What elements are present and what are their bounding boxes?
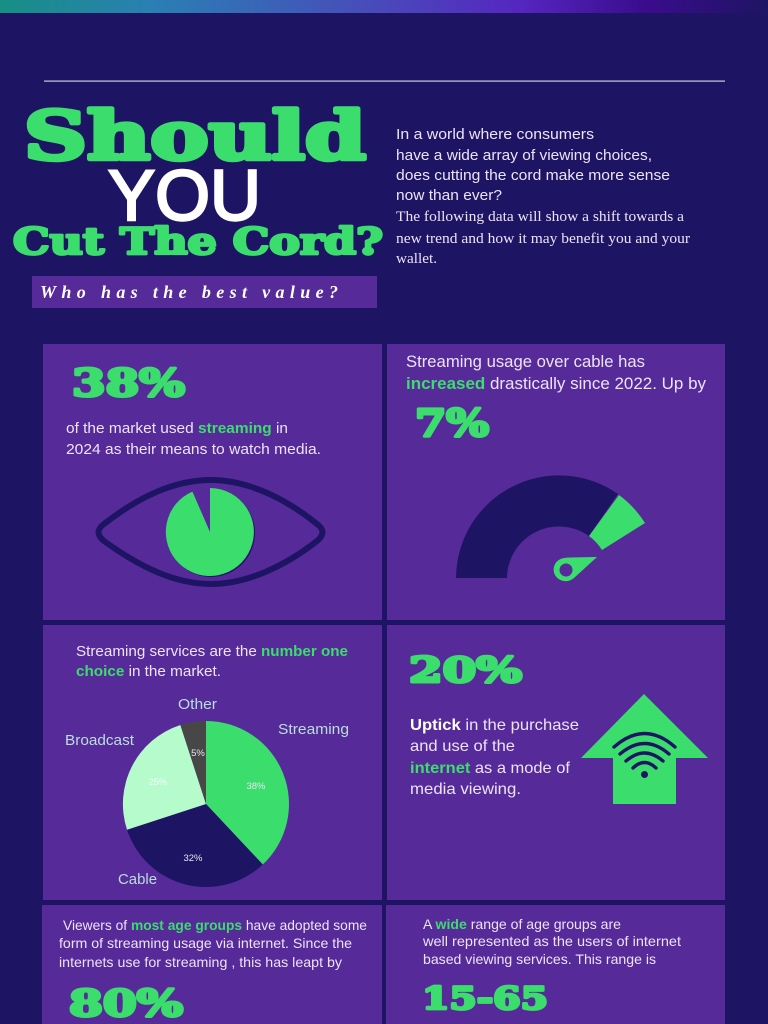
- intro text: new trend and how it may benefit you and your: [396, 231, 690, 247]
- subtitle banner: Who has the best value?: [40, 282, 338, 302]
- title line: Should: Should: [24, 97, 366, 175]
- chart: pie: 32%: [183, 853, 203, 864]
- text: wide range: A wide range of age groups are: [423, 916, 621, 932]
- title line: Cut The Cord?: Cut The Cord?: [13, 221, 383, 263]
- top gradient band: [0, 0, 768, 13]
- intro text: The following data will show a shift towards a: [396, 209, 684, 225]
- stat: 80%: 80%: [69, 983, 183, 1024]
- text: streaming over cable: increased drastically since 2022. Up by: [406, 375, 707, 393]
- icon: arrow with wifi: [581, 694, 708, 804]
- text: uptick: [410, 717, 579, 798]
- text: uptick: and use of the: [410, 738, 515, 755]
- text: number one choice: [76, 643, 348, 680]
- text: age groups: [59, 917, 367, 970]
- text: uptick: Uptick in the purchase: [410, 717, 579, 734]
- text: number one choice: Streaming services are the number one: [76, 643, 348, 660]
- panel: 20% internet uptick: [387, 625, 725, 900]
- chart: pie: 5%: [191, 748, 205, 759]
- text: wide range: [422, 916, 681, 967]
- stat: 38%: 38%: [72, 361, 185, 405]
- icon: eye with pie pupil: [98, 480, 322, 584]
- chart: pie: 25%: [148, 777, 168, 788]
- chart: pie: 38%: [246, 781, 266, 792]
- text: age groups: internets use for streaming , this has leapt by: [59, 954, 342, 970]
- stat: 7%: 7%: [415, 401, 489, 445]
- label: Cable: Cable: [118, 871, 157, 888]
- stat: 20%: 20%: [409, 650, 522, 691]
- text: market share: [66, 420, 321, 458]
- text: market share: of the market used streaming in: [66, 420, 288, 437]
- text: uptick: media viewing.: [410, 781, 521, 798]
- subtitle banner: [32, 276, 377, 308]
- intro text: now than ever?: [396, 187, 502, 204]
- text: wide range: based viewing services. This range is: [423, 951, 656, 967]
- text: age groups: Viewers of most age groups have adopted some: [63, 917, 367, 933]
- panel: 80% age groups: [42, 905, 382, 1024]
- panel: 38% streaming: [43, 344, 382, 620]
- intro text: wallet.: [396, 251, 437, 267]
- panel: 7% increase: [387, 344, 725, 620]
- intro text: [396, 126, 690, 267]
- label: Streaming: Streaming: [278, 721, 349, 738]
- title: [13, 97, 383, 263]
- intro text: have a wide array of viewing choices,: [396, 147, 652, 164]
- panel: age range: [386, 905, 725, 1024]
- text: uptick: internet as a mode of: [410, 760, 571, 777]
- intro text: does cutting the cord make more sense: [396, 167, 670, 184]
- text: age groups: form of streaming usage via internet. Since the: [59, 935, 352, 951]
- text: streaming over cable: [406, 353, 707, 393]
- stat: 15-65: 15-65: [422, 981, 548, 1017]
- text: market share: 2024 as their means to watch media.: [66, 441, 321, 458]
- title line: YOU: YOU: [108, 157, 261, 236]
- text: streaming over cable: Streaming usage over cable has: [406, 353, 645, 371]
- text: wide range: well represented as the users of internet: [422, 933, 681, 949]
- label: Other: Other: [178, 696, 217, 713]
- chart: gauge: [456, 475, 645, 581]
- text: number one choice: choice in the market.: [76, 663, 221, 680]
- chart: pie: [123, 721, 289, 887]
- intro text: In a world where consumers: [396, 126, 594, 143]
- panel: market share pie: [43, 625, 382, 900]
- label: Broadcast: Broadcast: [65, 732, 135, 749]
